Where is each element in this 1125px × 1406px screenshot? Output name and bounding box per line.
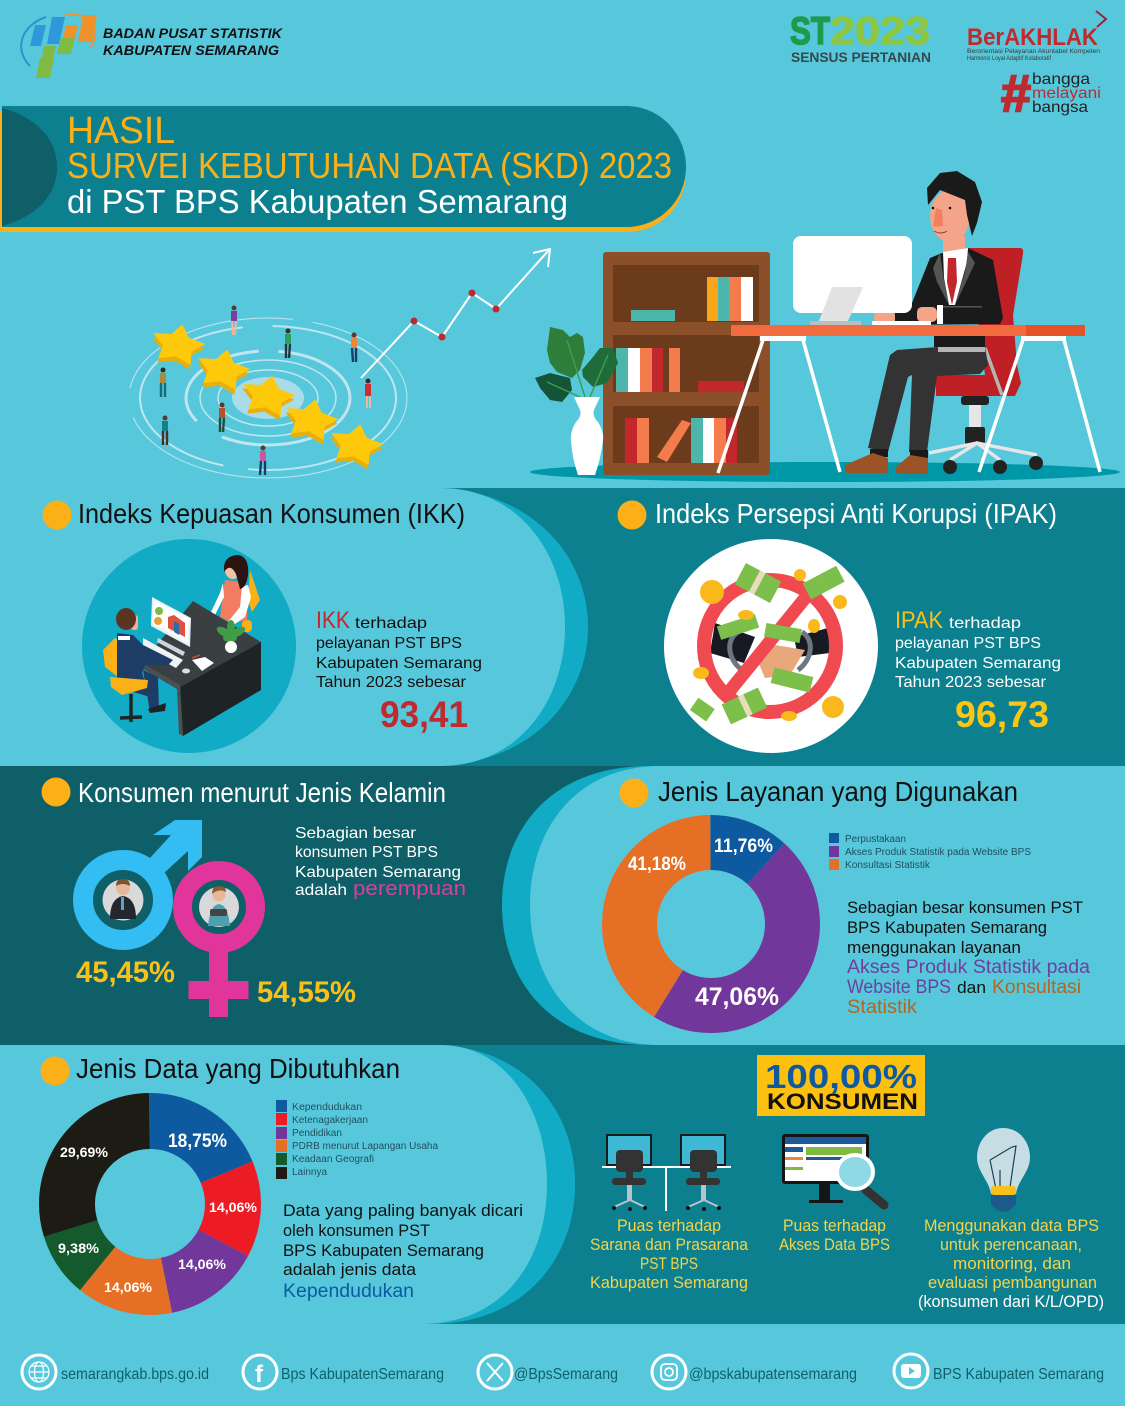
text: facilities satisfaction (590, 1216, 749, 1292)
illustration: anti corruption sign (664, 539, 878, 753)
text: data description: Data yang paling banyak dicari (283, 1202, 523, 1220)
legend: services (829, 833, 1031, 871)
logo: bangga melayani bangsa: bangga (1032, 71, 1090, 88)
rings (129, 318, 407, 478)
logo: bangga melayani bangsa: # (1001, 65, 1031, 123)
chart: services donut (628, 836, 792, 1011)
panel: IKK (42, 498, 482, 753)
value: female 54,55%: 54,55% (257, 976, 356, 1009)
callout: 100,00% konsumen (757, 1055, 925, 1116)
logo: BerAKHLAK (967, 11, 1106, 62)
text: IKK description: pelayanan PST BPS (316, 635, 462, 652)
text: IKK description: Kabupaten Semarang (316, 655, 482, 672)
icon: rising line chart arrow (361, 249, 550, 378)
logo: BerAKHLAK: Berorientasi Pelayanan Akuntabel Kompeten (967, 48, 1100, 55)
logo: bangga melayani bangsa: melayani (1032, 85, 1101, 102)
legend: data types: Ketenagakerjaan (292, 1115, 368, 1126)
callout: 100,00% konsumen: 100,00% (765, 1058, 917, 1095)
monitor (793, 236, 931, 325)
panel: 100% consumers (590, 1055, 1104, 1311)
text: data access satisfaction (779, 1216, 890, 1254)
floor shadow (530, 462, 1120, 482)
text: services description: dan (957, 979, 986, 997)
icon: male symbol with avatar (83, 820, 202, 940)
website link (22, 1355, 209, 1389)
title text: HASIL (67, 110, 175, 152)
chart: data donut: 9,38% (58, 1240, 100, 1256)
panel: consumers by gender (42, 777, 466, 1017)
chart: data donut: 14,06% (104, 1279, 153, 1295)
panel: services used (620, 776, 1090, 1018)
text: data usage: monitoring, dan (953, 1254, 1071, 1273)
callout: 100,00% konsumen: KONSUMEN (767, 1089, 918, 1114)
legend: data types: PDRB menurut Lapangan Usaha (292, 1141, 438, 1152)
instagram link (652, 1355, 857, 1389)
legend: services: Perpustakaan (845, 834, 906, 845)
facebook link: Bps KabupatenSemarang (281, 1366, 444, 1383)
text: data description: adalah jenis data (283, 1261, 417, 1279)
chart: data donut (58, 1121, 258, 1295)
icon: female symbol with avatar (182, 870, 256, 1017)
text: IKK description: terhadap (355, 615, 427, 632)
icon: monitor with magnifier (782, 1134, 884, 1205)
text: services description (847, 899, 1090, 1018)
panel: data needed (40, 1053, 523, 1302)
footer: contact and social links (22, 1354, 1104, 1389)
stars (148, 319, 386, 472)
facebook link: f (255, 1361, 264, 1388)
value: IPAK 96,73: 96,73 (955, 694, 1049, 735)
logo: BerAKHLAK: BerAKHLAK (967, 24, 1099, 51)
text: services description: Konsultasi (992, 977, 1081, 998)
organisation name: KABUPATEN SEMARANG (103, 43, 280, 58)
panel: gender and service background (0, 766, 1125, 1045)
text: data usage: untuk perencanaan, (940, 1235, 1082, 1254)
text: data description (283, 1202, 523, 1302)
text: data usage: Menggunakan data BPS (924, 1216, 1099, 1235)
text: services description: Statistik (847, 997, 918, 1018)
man (845, 171, 1003, 474)
heading: data needed: Jenis Data yang Dibutuhkan (76, 1053, 400, 1084)
text: services description: Akses Produk Statistik pada (847, 957, 1090, 978)
text: gender description: adalah (295, 882, 347, 899)
text: data usage (918, 1216, 1104, 1311)
chart: data donut: 14,06% (178, 1256, 227, 1272)
legend: services: Konsultasi Statistik (845, 860, 931, 871)
heading: services: Jenis Layanan yang Digunakan (658, 776, 1018, 807)
text: facilities satisfaction: PST BPS (640, 1254, 698, 1273)
chart: data donut: 14,06% (209, 1199, 258, 1215)
legend: data types: Kependudukan (292, 1102, 362, 1113)
text: services description: BPS Kabupaten Semarang (847, 919, 1047, 937)
chart: data donut: 29,69% (60, 1144, 109, 1160)
legend: data types: Keadaan Geografi (292, 1154, 374, 1165)
illustration: target rings, stars and people (129, 306, 407, 478)
heading: gender: Konsumen menurut Jenis Kelamin (78, 777, 446, 808)
youtube link (894, 1354, 1104, 1388)
text: data usage: (konsumen dari K/L/OPD) (918, 1292, 1104, 1311)
panel: data needs background (0, 1045, 1125, 1324)
logo: BerAKHLAK: Harmonis Loyal Adaptif Kolaboratif (967, 55, 1051, 62)
organisation name: BADAN PUSAT STATISTIK (103, 26, 283, 41)
logo: ST2023 Sensus Pertanian: 2023 (830, 10, 930, 53)
illustration: office with man at desk (530, 171, 1120, 482)
text: facilities satisfaction: Kabupaten Semarang (590, 1273, 748, 1292)
legend: data types: Pendidikan (292, 1128, 342, 1139)
logo: ST2023 Sensus Pertanian (790, 10, 931, 65)
text: IPAK description: terhadap (949, 615, 1021, 632)
value: IKK 93,41: 93,41 (380, 694, 468, 735)
chart: services donut: 41,18% (628, 854, 686, 875)
text: services description: Sebagian besar konsumen PST (847, 899, 1083, 917)
text: facilities satisfaction: Puas terhadap (617, 1216, 721, 1235)
logo: ST2023 Sensus Pertanian: ST (790, 10, 830, 53)
text: data access satisfaction: Puas terhadap (783, 1216, 886, 1235)
text: IKK description: IKK (316, 607, 350, 634)
text: data description: Kependudukan (283, 1281, 414, 1302)
X link (478, 1355, 618, 1389)
text: IKK description: Tahun 2023 sebesar (316, 674, 467, 691)
panel: IPAK (618, 498, 1061, 753)
plant and vase (535, 327, 618, 475)
text: data description: oleh konsumen PST (283, 1222, 430, 1240)
legend: services: Akses Produk Statistik pada Website BPS (845, 847, 1031, 858)
text: data usage: evaluasi pembangunan (928, 1273, 1097, 1292)
icon: light bulb (977, 1128, 1030, 1212)
chair (929, 248, 1043, 474)
text: gender description: perempuan (353, 878, 466, 900)
instagram link: @bpskabupatensemarang (689, 1366, 857, 1383)
people (160, 306, 371, 475)
text: IPAK description (895, 607, 1061, 691)
text: data description: BPS Kabupaten Semarang (283, 1242, 484, 1260)
bookcase (603, 252, 770, 475)
header: BPS logo and institution name (21, 14, 283, 78)
text: gender description: Kabupaten Semarang (295, 864, 461, 881)
legend: data types (276, 1100, 438, 1179)
text: IPAK description: Tahun 2023 sebesar (895, 674, 1047, 691)
legend: data types: Lainnya (292, 1167, 327, 1178)
heading: IPAK: Indeks Persepsi Anti Korupsi (IPAK) (655, 498, 1057, 529)
title text: di PST BPS Kabupaten Semarang (67, 183, 568, 220)
chart: data donut: 18,75% (168, 1131, 227, 1152)
text: IPAK description: Kabupaten Semarang (895, 655, 1061, 672)
panel: IKK background (0, 488, 1125, 766)
icon: BPS logo (21, 14, 97, 78)
title text (67, 110, 672, 220)
youtube link: BPS Kabupaten Semarang (933, 1366, 1104, 1383)
text: services description: Website BPS (847, 977, 951, 998)
heading: IKK: Indeks Kepuasan Konsumen (IKK) (78, 498, 465, 529)
text: gender description (295, 825, 466, 900)
title text: SURVEI KEBUTUHAN DATA (SKD) 2023 (67, 145, 672, 186)
facebook link (243, 1355, 444, 1389)
logo: bangga melayani bangsa (1001, 65, 1101, 123)
text: facilities satisfaction: Sarana dan Prasarana (590, 1235, 749, 1254)
title banner (0, 106, 686, 232)
text: IKK description (316, 607, 482, 691)
icon: desks and chairs (602, 1135, 731, 1211)
text: data access satisfaction: Akses Data BPS (779, 1235, 890, 1254)
website link: semarangkab.bps.go.id (61, 1366, 209, 1383)
logo: ST2023 Sensus Pertanian: SENSUS PERTANIAN (791, 50, 931, 65)
illustration: two people at isometric desk (82, 539, 296, 753)
text: IPAK description: pelayanan PST BPS (895, 635, 1041, 652)
organisation name (103, 26, 283, 58)
logo: bangga melayani bangsa: bangsa (1032, 99, 1088, 116)
text: services description: menggunakan layanan (847, 939, 1021, 957)
chart: services donut: 47,06% (695, 983, 779, 1011)
text: IPAK description: IPAK (895, 607, 943, 634)
value: male 45,45%: 45,45% (76, 956, 175, 989)
text: gender description: Sebagian besar (295, 825, 417, 842)
X link: @BpsSemarang (514, 1366, 618, 1383)
desk (718, 325, 1100, 473)
text: gender description: konsumen PST BPS (295, 844, 438, 861)
chart: services donut: 11,76% (714, 836, 773, 857)
